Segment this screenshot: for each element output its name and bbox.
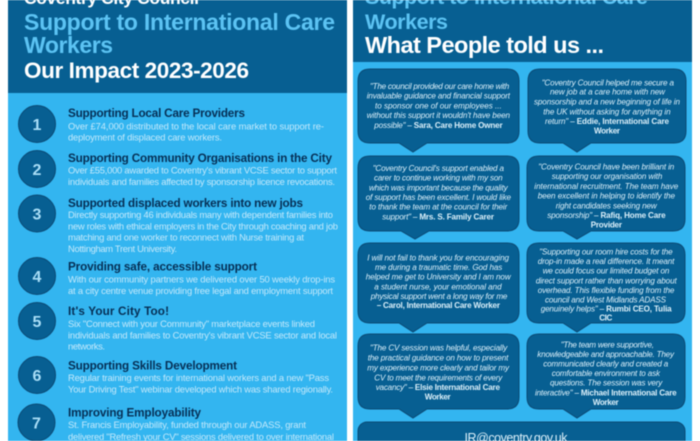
quote: Michael: communicated clearly and created a (543, 360, 669, 369)
panel: what people told us (353, 0, 692, 441)
quote: Rumbi: drop-in made a real difference. It meant (538, 257, 675, 266)
item 7: Improving Employability (68, 407, 201, 420)
quote: Michael: questions. The session was very (550, 379, 663, 388)
quote: Sara: possible" – Sara, Care Home Owner (373, 121, 503, 130)
item 5: It's Your City Too! (68, 305, 169, 318)
item 3: Supported displaced workers into new jobs (68, 197, 303, 210)
item 4: 4 (33, 269, 42, 286)
item 7 (18, 404, 334, 441)
quote: Eddie: sponsorship and a new beginning of life in (534, 98, 680, 107)
item 3: Nottingham Trent University. (68, 243, 177, 254)
quote: Michael: "The team were supportive, (561, 340, 654, 349)
quote: Rumbi: direct support rather than worrying about (536, 276, 677, 285)
item 1: 1 (33, 117, 42, 134)
title: support to international care workers (365, 0, 648, 34)
item 6: Supporting Skills Development (68, 360, 237, 373)
quote: Michael (527, 334, 685, 418)
quote: Sara: "The council provided our care home with (370, 82, 510, 91)
quote: Elsie: CV to meet the requirements of every (374, 373, 503, 382)
heading: our impact: Our Impact 2023-2026 (24, 58, 249, 83)
item 7: 7 (32, 416, 41, 432)
quote: Carol: me during a traumatic time. God has (375, 263, 502, 272)
item 5: Six "Connect with your Community" marketplace events linked (68, 318, 315, 329)
item 3: 3 (33, 206, 42, 224)
quote: Sara: without this support it wouldn't have been (367, 111, 510, 120)
quote: Rafiq: Provider (591, 221, 623, 230)
item 6: Regular training events for international workers and a new "Pass (68, 372, 329, 383)
item 6: Your Driving Test" webinar developed which was shared regionally. (68, 384, 333, 395)
quote: Elsie: vacancy" – Elsie International Care (376, 383, 500, 392)
item 2: Supporting Community Organisations in the City (68, 152, 332, 165)
quote: Rumbi: we could focus our limited budget on (543, 267, 670, 276)
quote: Elsie: "The CV session was helpful, especially (370, 344, 508, 353)
quote: Michael: interactive" – Michael International Care (535, 388, 677, 397)
quote: Carol (358, 243, 519, 332)
quote: Rumbi: council and West Midlands ADASS (545, 296, 667, 305)
quote: Rafiq: right candidates seeking new (556, 201, 658, 210)
item 4: at a city centre venue providing free legal and employment support (68, 285, 333, 296)
quote: Mrs. S: which was important because the quality (369, 183, 509, 192)
quote: Eddie: Worker (594, 126, 621, 135)
quote: Carol: helped me get to University and I am now (366, 273, 512, 282)
item 5: networks. (68, 341, 105, 352)
quote: Eddie (528, 69, 686, 152)
quote: Rafiq: supporting our organisation with (552, 172, 663, 181)
item 1: Over £74,000 distributed to the local care market to support re- (68, 120, 324, 132)
header: what people told us (353, 0, 692, 62)
heading: what people told us: What People told us ... (365, 32, 604, 58)
quote: Carol: a student nurse, your emotional and (374, 282, 502, 291)
item 3: new roles with ethical employers in the City through coaching and job (68, 221, 338, 232)
quote: Rumbi: CIC (599, 314, 612, 323)
quote: Eddie: return" – Eddie, International Care (545, 117, 669, 126)
item 2: Over £55,000 awarded to Coventry's vibrant VCSE sector to support (68, 164, 337, 176)
quote: Eddie: "Coventry Council helped me secure a (542, 78, 674, 87)
title: support to international care workers: Workers (24, 32, 113, 58)
item 4: With our community partners we delivered over 50 weekly drop-ins (68, 273, 335, 284)
item 4 (18, 258, 335, 296)
item 2: individuals and families affected by sponsorship licence revocations. (68, 176, 335, 187)
title: support to international care workers: Workers (365, 10, 448, 34)
quote: Rafiq: international recruitment. The team have (534, 182, 679, 191)
quote: Elsie: the practical guidance on how to present (368, 354, 509, 363)
quote: Mrs. S: of support has been excellent. I would like (366, 193, 511, 202)
quote: Michael: Worker (593, 398, 620, 407)
quote: Michael: knowledgeable and approachable. They (537, 350, 675, 359)
item 3 (18, 195, 338, 254)
quote: Mrs. S (358, 156, 519, 239)
quote: Mrs. S: "Coventry Council's support enabled a (373, 164, 504, 173)
item 2: 2 (33, 162, 42, 179)
quote: Rumbi (527, 243, 685, 332)
item 3: matching and one worker to reconnect with Nurse training at (68, 232, 304, 243)
quote: Rumbi: genuinely helps" – Rumbi CEO, Tulia (541, 304, 672, 313)
quote: Elsie: Worker (425, 393, 452, 402)
title: support to international care workers (24, 9, 335, 58)
item 5 (18, 302, 337, 352)
quote: Sara: invaluable guidance and financial support (367, 92, 511, 101)
item 1: Supporting Local Care Providers (68, 107, 245, 120)
quote: Michael: comfortable environment to ask (552, 369, 661, 378)
quote: Sara (358, 69, 519, 152)
item 3: Directly supporting 46 individuals many with dependent families into (68, 209, 333, 220)
title: support to international care workers: Support to International Care (24, 9, 335, 35)
quote: Sara: to sponsor one of our employees ... (375, 102, 502, 111)
item 5: individuals and families to Coventry's vibrant VCSE sector and local (68, 329, 337, 340)
quote: Rumbi: "Supporting our room hire costs for the (539, 247, 673, 256)
quote: Mrs. S: carer to continue working with my son (374, 174, 503, 183)
quote: Mrs. S: support" – Mrs. S. Family Carer (382, 212, 495, 221)
quote: Rafiq: been excellent in helping to identify the (538, 192, 675, 201)
quote: Carol: – Carol, International Care Worker (377, 301, 501, 310)
item 7: St. Francis Employability, funded through our ADASS, grant (68, 419, 306, 430)
panel: our impact (8, 0, 347, 441)
quote: Carol: I will not fail to thank you for encouraging (367, 253, 509, 262)
item 6: 6 (33, 368, 42, 385)
item 1 (18, 106, 324, 142)
quote: Mrs. S: to thank the team at the council for their (369, 203, 508, 212)
quote: Rafiq: sponsorship" – Rafiq, Home Care (547, 211, 666, 220)
item 6 (18, 356, 333, 395)
quote: Elsie: my experience more clearly and tailor my (367, 364, 510, 373)
item 2 (18, 150, 337, 188)
quote: Rafiq (527, 156, 685, 239)
contact box (358, 422, 685, 441)
quote: Eddie: the UK without asking for anything in (543, 107, 671, 116)
item 4: Providing safe, accessible support (68, 261, 257, 274)
header: impact (8, 0, 347, 93)
quote: Elsie (358, 334, 519, 418)
quote: Rumbi: overhead. This flexible funding from the (538, 286, 675, 295)
quote: Rafiq: "Coventry Council have been brilliant in (538, 162, 675, 171)
item 5: 5 (33, 314, 42, 331)
quote: Carol: physical support went a long way for me (370, 292, 508, 301)
quote: Eddie: new job at a care home with new (550, 88, 666, 97)
item 1: deployment of displaced care workers. (68, 132, 222, 142)
